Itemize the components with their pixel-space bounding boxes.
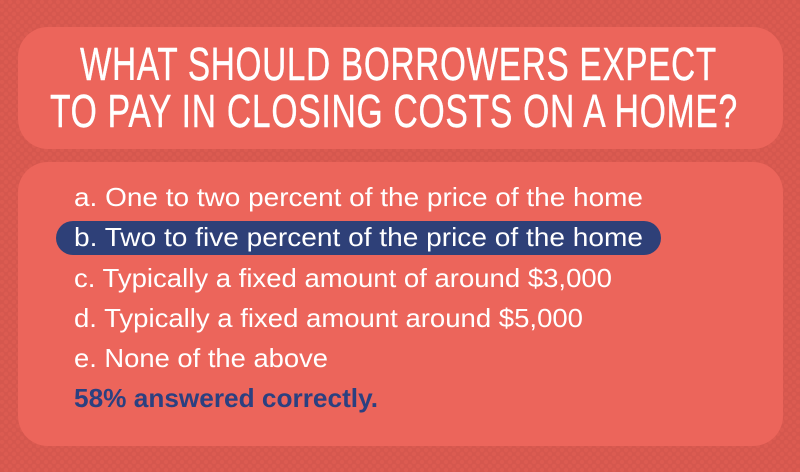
panel: answers: [18, 162, 783, 446]
answer b: highlighted correct answer: b. Two to five percent of the price of the home: [74, 222, 643, 252]
answer a: a. One to two percent of the price of the home: [74, 182, 643, 212]
panel: title: [18, 27, 783, 149]
answer d: d. Typically a fixed amount around $5,000: [74, 303, 583, 333]
heading: question: [50, 38, 738, 137]
answer e: e. None of the above: [74, 343, 328, 373]
result statement: 58% answered correctly.: [74, 383, 378, 413]
answer c: c. Typically a fixed amount of around $3,000: [74, 263, 612, 293]
